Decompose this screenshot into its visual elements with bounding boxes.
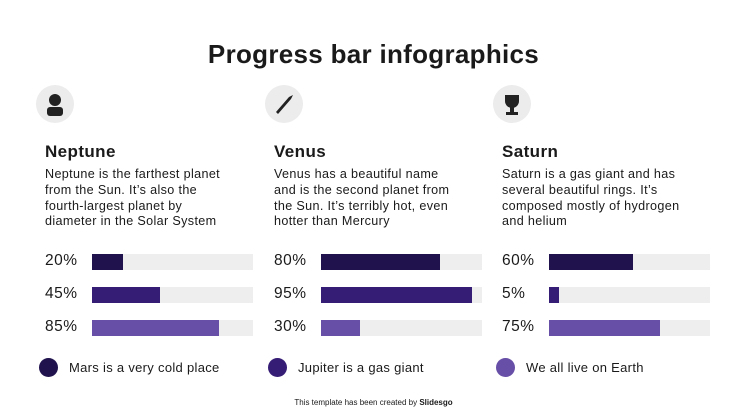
text: Neptune is the farthest planet xyxy=(45,167,220,181)
title: Progress bar infographics xyxy=(208,39,539,69)
bar 5 xyxy=(502,285,710,303)
bar 85 xyxy=(45,318,253,336)
icon: rocket xyxy=(265,85,303,123)
text: the Sun. It’s terribly hot, even xyxy=(274,199,448,213)
text xyxy=(45,167,220,228)
bar 5: 5% xyxy=(502,285,525,302)
bar 60: 60% xyxy=(502,252,535,269)
text xyxy=(274,167,449,228)
legend xyxy=(39,358,220,377)
bar 20 xyxy=(45,252,253,270)
text: composed mostly of hydrogen xyxy=(502,199,679,213)
heading: Venus xyxy=(274,142,326,161)
bar 95: 95% xyxy=(274,285,307,302)
panel: venus xyxy=(265,85,482,377)
panel: saturn xyxy=(493,85,710,377)
text: diameter in the Solar System xyxy=(45,214,216,228)
legend xyxy=(268,358,424,377)
text: from the Sun. It’s also the xyxy=(45,183,197,197)
bar 75: 75% xyxy=(502,318,535,335)
bar 60 xyxy=(502,252,710,270)
bar 30 xyxy=(274,318,482,336)
footer credit: This template has been created by Slidesgo xyxy=(294,398,453,407)
bar 95 xyxy=(274,285,482,303)
legend: Jupiter is a gas giant xyxy=(298,360,424,375)
text: several beautiful rings. It’s xyxy=(502,183,658,197)
bar 80: 80% xyxy=(274,252,307,269)
bar 20: 20% xyxy=(45,252,78,269)
text: fourth-largest planet by xyxy=(45,199,182,213)
bar 45 xyxy=(45,285,253,303)
bar 80 xyxy=(274,252,482,270)
text xyxy=(502,167,679,228)
bar 85: 85% xyxy=(45,318,78,335)
text: Saturn is a gas giant and has xyxy=(502,167,675,181)
icon: astronaut xyxy=(36,85,74,123)
icon: trophy xyxy=(493,85,531,123)
text: and helium xyxy=(502,214,567,228)
legend xyxy=(496,358,644,377)
bar 30: 30% xyxy=(274,318,307,335)
heading: Saturn xyxy=(502,142,558,161)
legend: Mars is a very cold place xyxy=(69,360,220,375)
bar 45: 45% xyxy=(45,285,78,302)
heading: Neptune xyxy=(45,142,116,161)
text: hotter than Mercury xyxy=(274,214,390,228)
text: and is the second planet from xyxy=(274,183,449,197)
text: Venus has a beautiful name xyxy=(274,167,439,181)
panel: neptune xyxy=(36,85,253,377)
bar 75 xyxy=(502,318,710,336)
legend: We all live on Earth xyxy=(526,360,644,375)
